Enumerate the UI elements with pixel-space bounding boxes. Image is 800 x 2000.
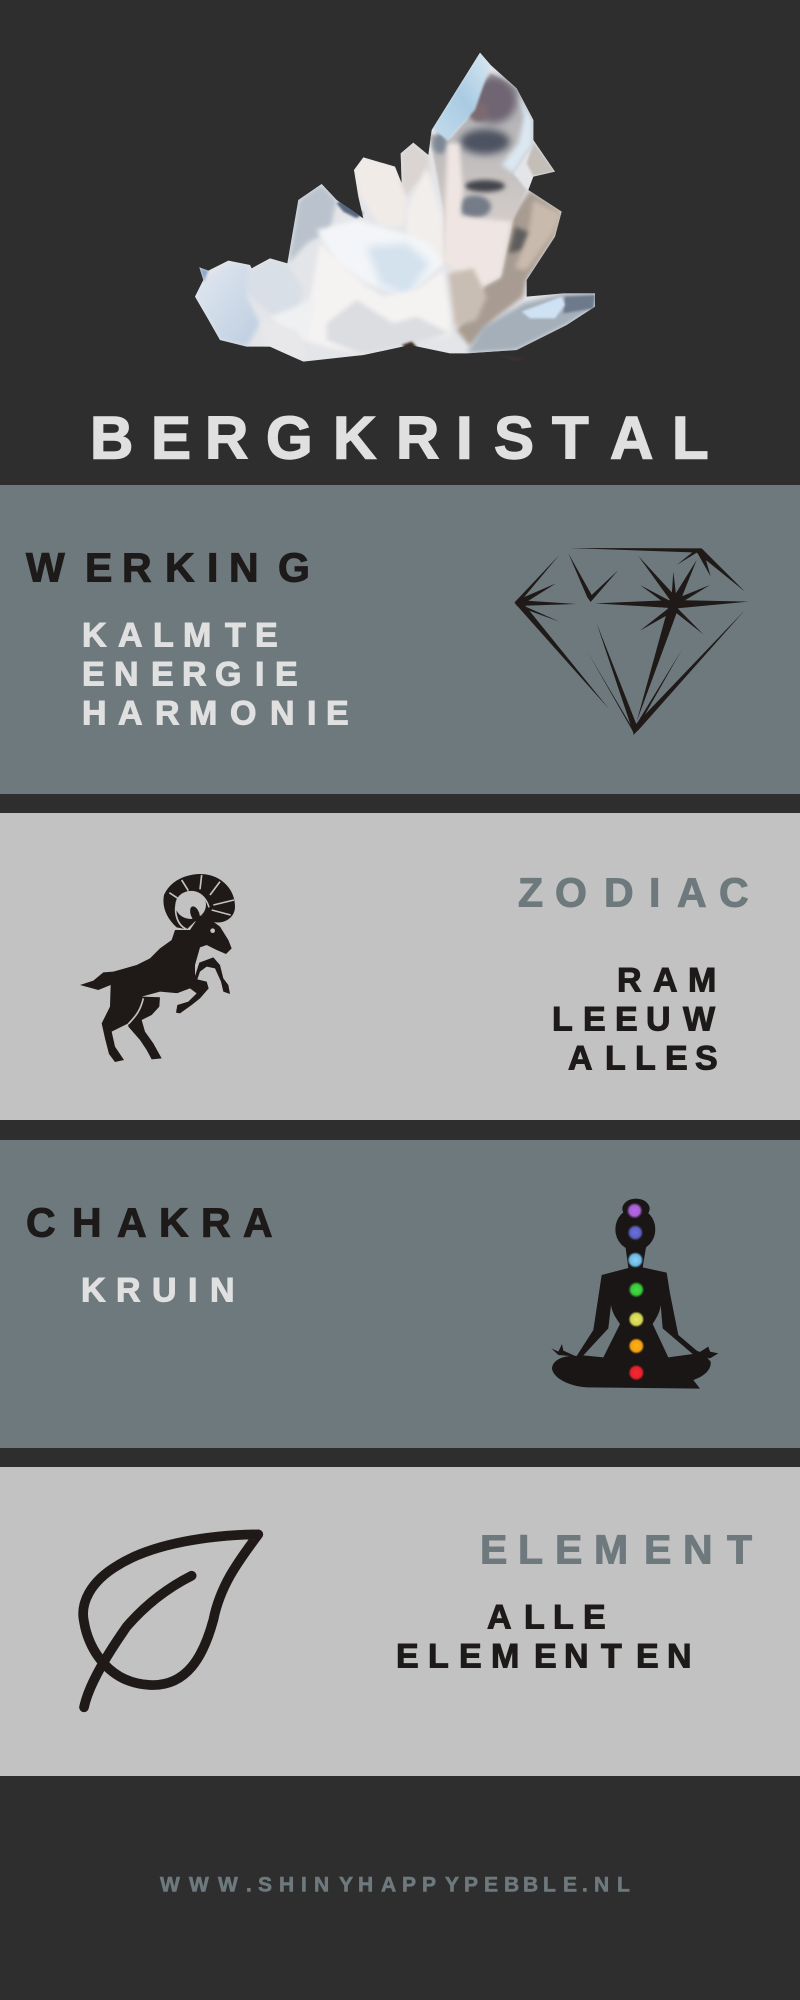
heading: chakra: CHAKRA: [26, 1200, 273, 1246]
text block: werking list: [82, 616, 349, 732]
panel: element: [0, 1467, 800, 1776]
panel: chakra: [0, 1140, 800, 1448]
icon: leaf: [83, 1534, 258, 1707]
text block: werking list: HARMONIE: [82, 694, 349, 732]
footer url: WWW.SHINYHAPPYPEBBLE.NL: [160, 1874, 630, 1896]
text block: element list: ELEMENTEN: [396, 1638, 692, 1676]
icon: ram: [80, 874, 235, 1062]
crystal cluster photo: [183, 43, 603, 370]
text block: element list: ALLE: [487, 1598, 606, 1636]
text block: zodiac list: RAM: [617, 962, 716, 1000]
panel: werking: [0, 485, 800, 794]
title: BERGKRISTAL: [90, 404, 709, 472]
text: kruin: KRUIN: [81, 1272, 235, 1310]
arm gaps: [583, 1305, 693, 1357]
text block: zodiac list: ALLES: [568, 1040, 718, 1078]
icon: meditating figure with chakras: [551, 1199, 718, 1389]
text block: zodiac list: [552, 962, 718, 1078]
chakra dots: [627, 1203, 644, 1381]
icon: diamond: [514, 548, 748, 735]
silhouette: [551, 1199, 718, 1389]
text block: werking list: ENERGIE: [82, 656, 298, 694]
heading: element: ELEMENT: [480, 1526, 752, 1572]
panel: zodiac: [0, 813, 800, 1120]
heading: werking: WERKING: [26, 544, 310, 590]
text block: werking list: KALMTE: [82, 616, 278, 654]
heading: zodiac: ZODIAC: [518, 870, 749, 916]
text block: element list: [396, 1598, 692, 1676]
text block: zodiac list: LEEUW: [552, 1000, 716, 1038]
